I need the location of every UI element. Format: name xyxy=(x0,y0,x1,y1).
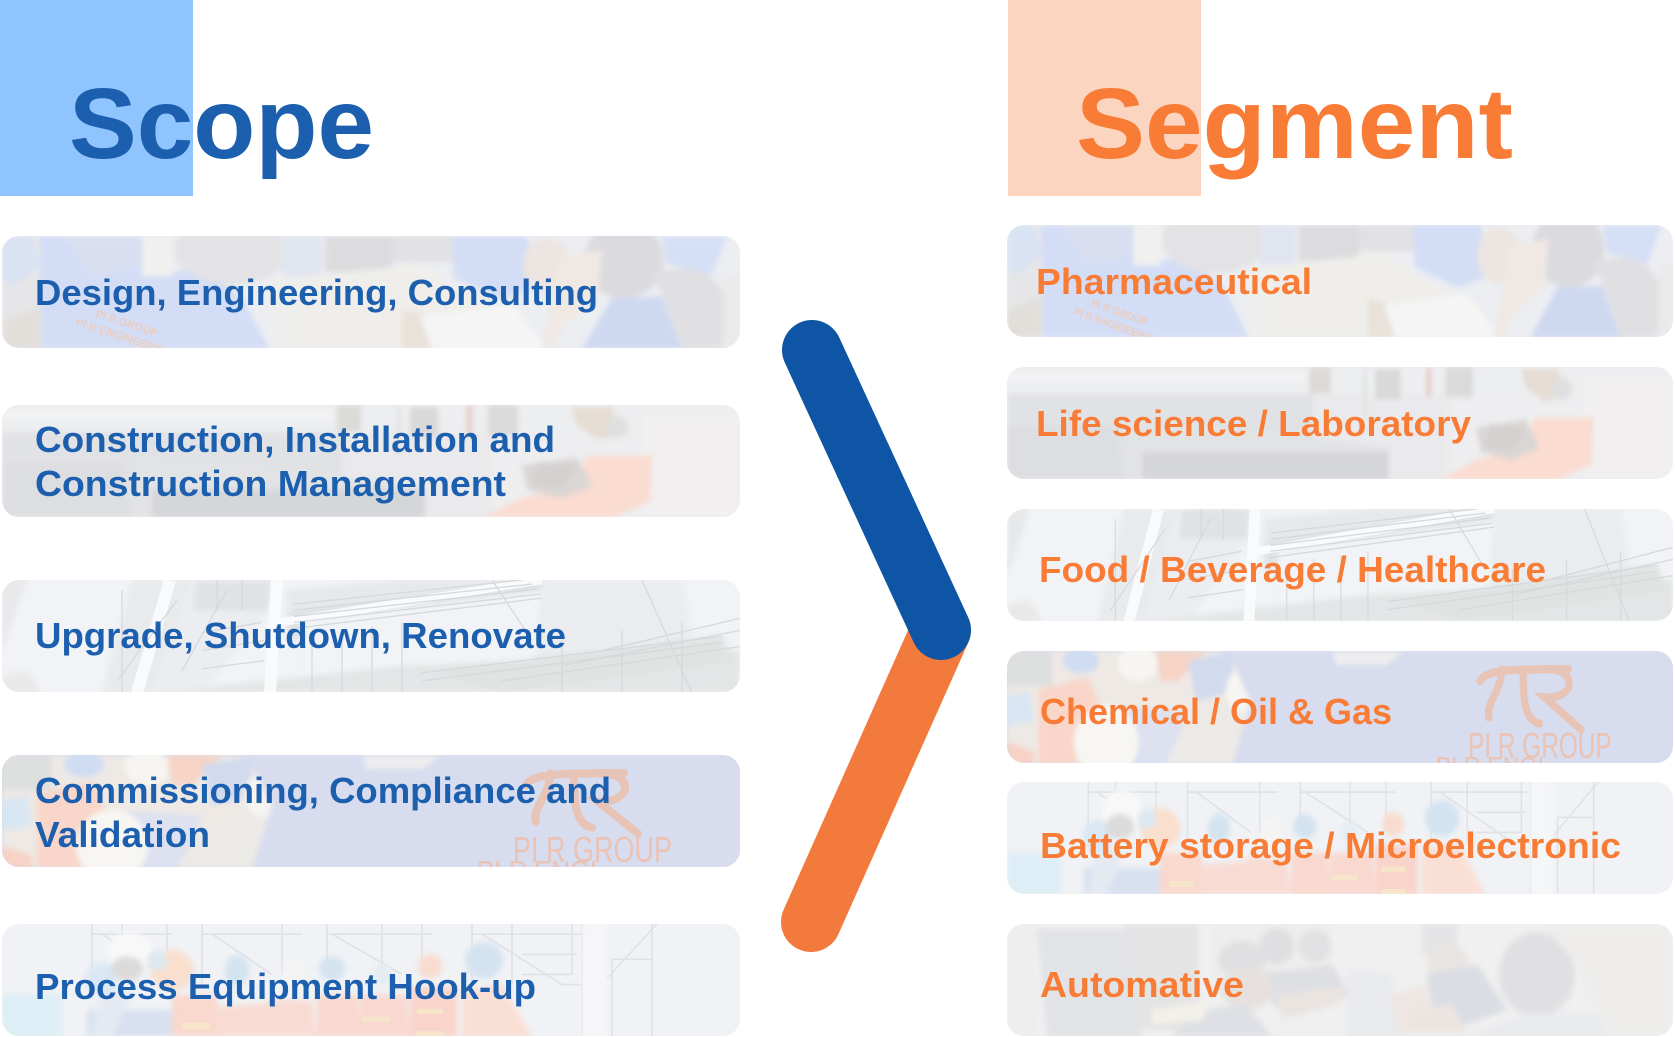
card: Pharmaceutical xyxy=(1007,225,1673,337)
card: Pharmaceutical: Pharmaceutical xyxy=(1036,261,1312,302)
card: Commissioning, Compliance and Validation: Commissioning, Compliance and xyxy=(35,770,611,811)
card: Commissioning, Compliance and Validation xyxy=(2,755,740,867)
card: Commissioning, Compliance and Validation: Validation xyxy=(35,814,210,855)
heading block: Segment: Segment xyxy=(1076,68,1513,180)
card: Life science / Laboratory xyxy=(1007,367,1673,480)
card: Battery storage / Microelectronic: Battery storage / Microelectronic xyxy=(1040,825,1621,866)
heading block: Scope: Scope xyxy=(69,68,374,180)
card: Food / Beverage / Healthcare xyxy=(1007,509,1673,622)
card: Life science / Laboratory: Life science / Laboratory xyxy=(1036,403,1471,444)
card: Construction, Installation and Construction Management: Construction, Installation and xyxy=(35,419,555,460)
card: Battery storage / Microelectronic xyxy=(1007,782,1673,895)
card: Process Equipment Hook-up xyxy=(2,924,740,1037)
card: Construction, Installation and Construction Management xyxy=(2,405,740,518)
panel: segment column xyxy=(1007,0,1673,1037)
card: Process Equipment Hook-up: Process Equipment Hook-up xyxy=(35,966,536,1007)
card: Automative xyxy=(1007,924,1673,1037)
card: Upgrade, Shutdown, Renovate xyxy=(2,580,740,693)
card: Construction, Installation and Construction Management: Construction Management xyxy=(35,463,506,504)
heading block: Segment xyxy=(1008,0,1513,196)
panel: scope column xyxy=(0,0,740,1037)
card: Automative: Automative xyxy=(1040,964,1244,1005)
card: Design, Engineering, Consulting xyxy=(2,236,740,348)
card: Design, Engineering, Consulting: Design, Engineering, Consulting xyxy=(35,272,598,313)
card: Chemical / Oil & Gas xyxy=(1007,651,1673,763)
card: Upgrade, Shutdown, Renovate: Upgrade, Shutdown, Renovate xyxy=(35,615,566,656)
arrow: chevron pointing from scope to segment xyxy=(811,350,941,922)
heading block: Scope xyxy=(0,0,374,196)
card: Chemical / Oil & Gas: Chemical / Oil & Gas xyxy=(1040,691,1392,732)
card: Food / Beverage / Healthcare: Food / Beverage / Healthcare xyxy=(1039,549,1546,590)
